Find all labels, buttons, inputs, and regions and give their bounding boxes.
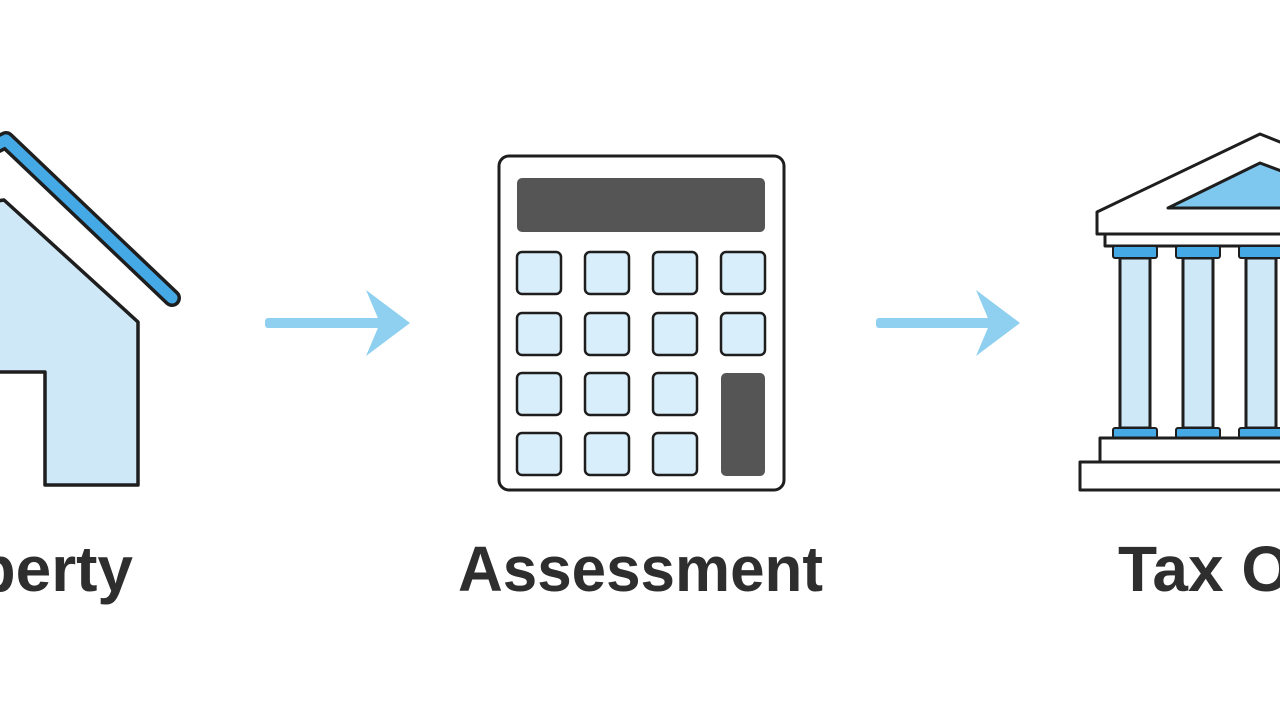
arrow 2: [876, 290, 1020, 356]
icon: house: [0, 140, 172, 485]
calculator screen: [517, 178, 765, 232]
arrow 1: [265, 290, 410, 356]
icon: tax office building: [1080, 134, 1280, 490]
icon: calculator: [499, 156, 784, 490]
calculator buttons: [517, 252, 765, 476]
label: Assessment: Assessment: [458, 533, 823, 605]
